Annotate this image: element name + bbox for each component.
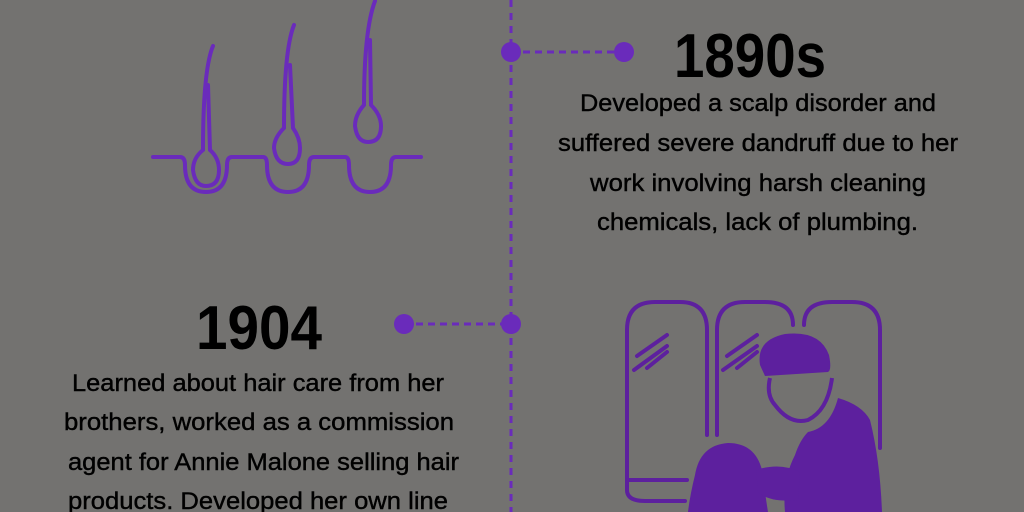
timeline vertical dashed line: [510, 0, 512, 512]
heading 1904: 1904: [196, 294, 322, 363]
text block 1904: [64, 370, 459, 512]
text block 1904: agent for Annie Malone selling hair: [68, 449, 459, 476]
text block 1904: brothers, worked as a commission: [64, 409, 454, 436]
connector 1890s: [501, 42, 634, 62]
heading 1890s: 1890s: [674, 22, 826, 91]
icon: woman at salon mirror: [627, 302, 882, 512]
text block 1890s: work involving harsh cleaning: [589, 170, 926, 197]
text block 1890s: Developed a scalp disorder and: [580, 90, 936, 117]
text block 1890s: chemicals, lack of plumbing.: [597, 209, 918, 236]
text block 1890s: suffered severe dandruff due to her: [558, 130, 958, 157]
connector 1904: [394, 314, 521, 334]
text block 1904: Learned about hair care from her: [72, 370, 444, 397]
text block 1890s: [558, 90, 958, 236]
icon: hair follicles: [153, 1, 421, 192]
